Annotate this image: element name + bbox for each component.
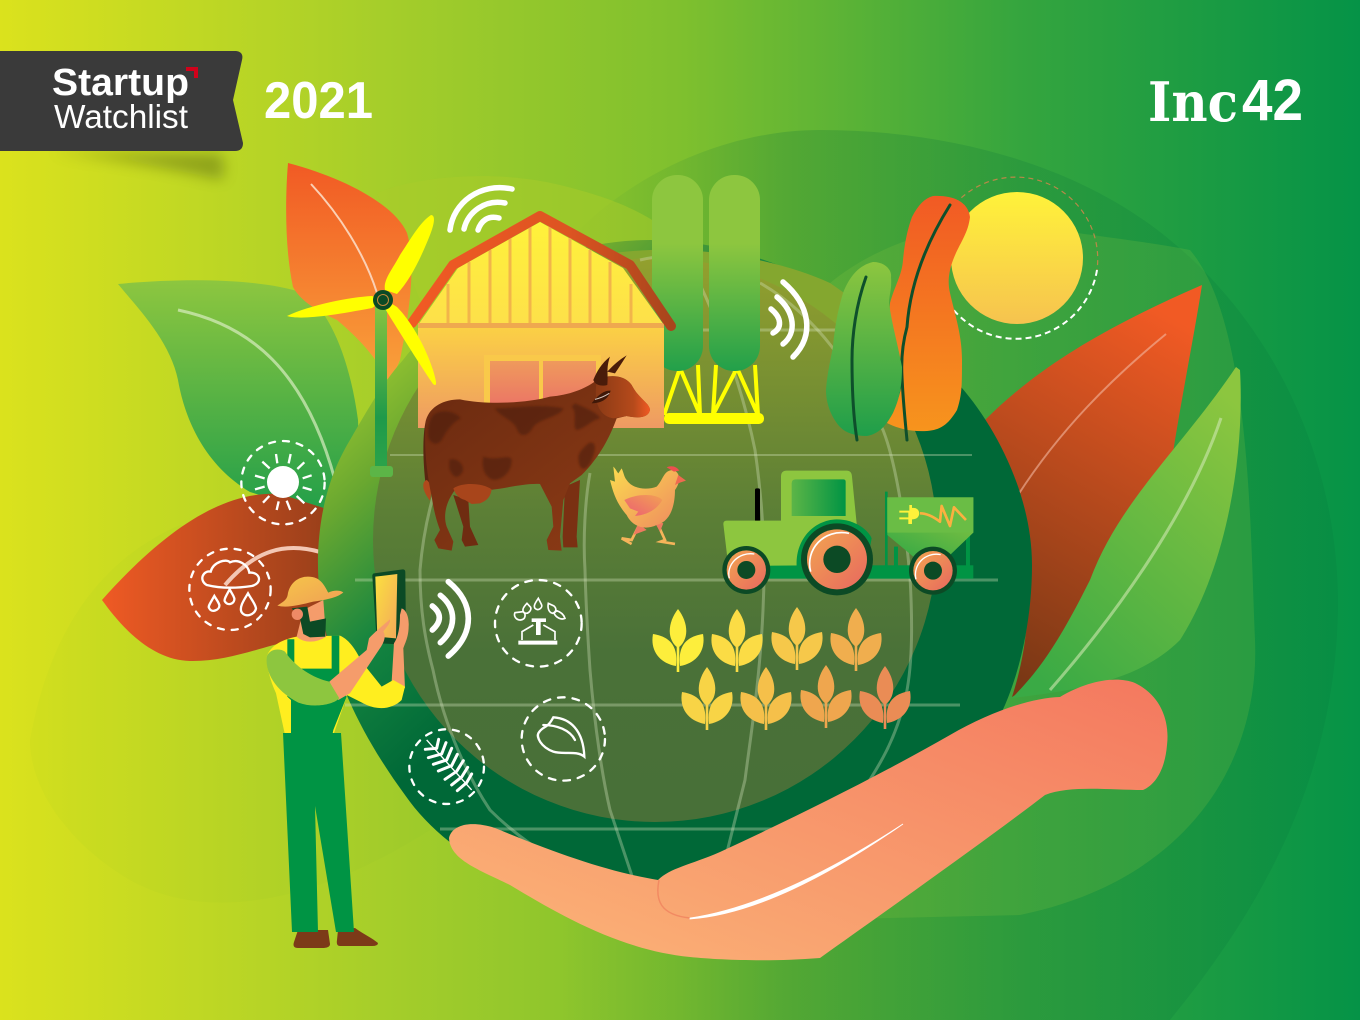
leaf: top orange [286, 163, 411, 380]
leaf: left green [118, 280, 358, 520]
Inc42 logo: 42 [1242, 68, 1303, 133]
wind turbine [287, 215, 436, 477]
sun dashed ring: top arc [955, 177, 1098, 270]
farmer yellow sleeve [343, 650, 405, 708]
inner globe [373, 258, 937, 822]
leaf: right green [1012, 367, 1241, 698]
cow far front leg [563, 480, 580, 547]
crops [652, 607, 911, 730]
tree: orange [887, 196, 970, 440]
badge text: Startup: Startup [52, 62, 189, 104]
year: 2021 [264, 72, 373, 130]
farmer [267, 569, 409, 948]
cow horns [593, 355, 627, 386]
olive hill behind globe [500, 250, 920, 420]
icon: rain cloud [189, 549, 271, 630]
outer globe [318, 240, 1032, 905]
tractor [722, 471, 973, 595]
cow tail tuft [423, 480, 431, 501]
farmer sleeve [267, 650, 339, 706]
red corner mark [186, 67, 198, 78]
icon: wheat sprig [409, 729, 484, 804]
chicken [610, 466, 686, 544]
Inc42 logo [1148, 68, 1303, 134]
wifi: left of globe [432, 582, 468, 656]
hand highlight [690, 824, 903, 919]
hand [449, 680, 1168, 960]
cow eye [592, 391, 611, 403]
thumb crease [658, 880, 690, 918]
sun [951, 192, 1083, 324]
icon: leaf [522, 697, 605, 781]
farmer overalls [287, 636, 347, 735]
cow [423, 355, 650, 551]
tractor cab window [792, 479, 846, 516]
tractor wheels [722, 523, 957, 595]
wifi: right of silos [771, 282, 807, 357]
tractor body [723, 471, 857, 566]
Inc42 logo: Inc [1148, 70, 1238, 134]
farmer shoes [294, 928, 378, 948]
tree: green [826, 262, 902, 440]
globe grid lines [345, 256, 998, 905]
farmer far forearm [392, 608, 409, 688]
farmer torso [267, 636, 362, 735]
barn door [484, 355, 601, 428]
sun dashed ring: bottom arc [947, 270, 1097, 339]
badge text: Watchlist: Watchlist [54, 98, 188, 135]
chicken wing [624, 495, 662, 516]
plug icon [899, 505, 919, 524]
leaf: left red [102, 494, 330, 661]
icon: sprinkler [495, 580, 582, 667]
cow body [425, 376, 650, 551]
silos [652, 175, 764, 424]
icon: sun ring [241, 441, 325, 524]
badge shadow [50, 152, 224, 180]
cow udder [453, 484, 492, 504]
farmer forearm [329, 619, 390, 700]
barn [412, 216, 671, 428]
badge: Startup Watchlist [0, 51, 243, 151]
turbine blades [287, 215, 436, 385]
tablet [372, 569, 406, 645]
farmer legs [283, 733, 354, 932]
hopper [885, 492, 970, 572]
wifi: above barn [450, 188, 512, 230]
leaf: right red [985, 285, 1202, 697]
farmer hat [277, 577, 343, 607]
cow spots [428, 403, 600, 480]
cow head [596, 376, 650, 418]
farmer neck and head [297, 600, 326, 642]
cow far hind leg [453, 495, 478, 547]
